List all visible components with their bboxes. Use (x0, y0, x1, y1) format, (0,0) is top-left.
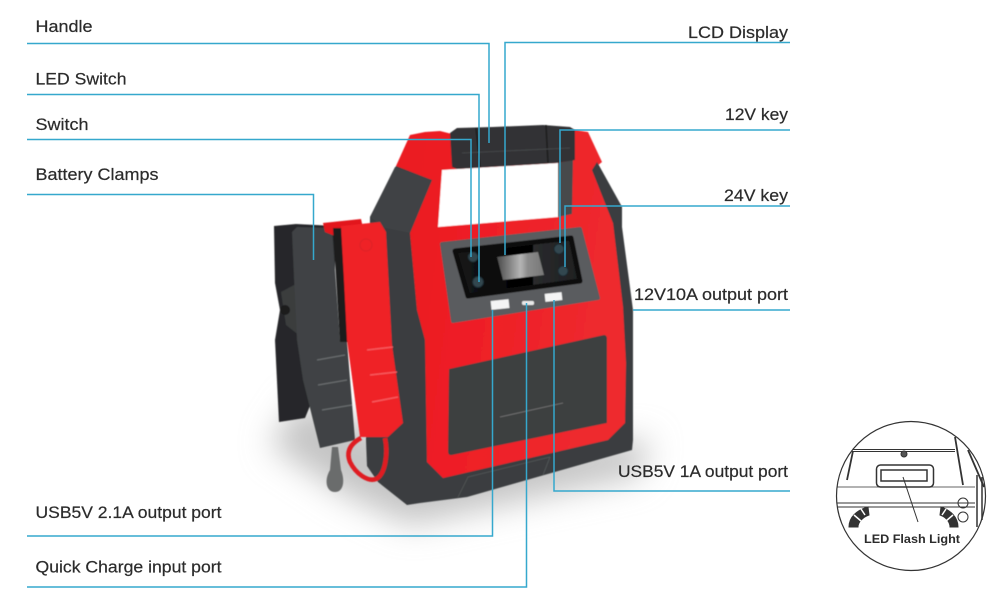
red frame of handle and front (396, 130, 626, 478)
label: Battery Clamps: Battery Clamps (36, 166, 158, 184)
USB and input ports (491, 292, 562, 310)
inset: LED flash light (836, 422, 986, 570)
label: USB5V 1A output port: USB5V 1A output port (618, 463, 788, 481)
label: 24V key: 24V key (724, 187, 789, 205)
label: Switch: Switch (36, 116, 88, 134)
label: LCD Display: LCD Display (688, 24, 789, 42)
red clamp cable loop (348, 438, 386, 480)
right grey side guard (592, 162, 622, 227)
callout leader lines (27, 42, 790, 587)
label: USB5V 2.1A output port: USB5V 2.1A output port (36, 504, 222, 522)
rear dark body (366, 150, 633, 505)
label: LED Switch: LED Switch (36, 70, 126, 88)
inset caption: LED Flash Light (864, 532, 960, 546)
label: 12V10A output port: 12V10A output port (634, 286, 788, 304)
handle window (438, 163, 558, 227)
dark inner strip of the right upright (558, 160, 573, 217)
ground shadow (270, 400, 650, 525)
handle grip (450, 125, 575, 169)
clamp grey pull tab (327, 447, 343, 492)
inset line drawing (837, 437, 984, 527)
product: jump starter (274, 125, 633, 505)
speaker grille (448, 335, 607, 455)
label: Quick Charge input port: Quick Charge input port (36, 558, 222, 576)
skirt detail (458, 457, 550, 497)
panel buttons (468, 244, 568, 288)
left grey shoulder guard (370, 167, 432, 233)
control panel grey bezel (442, 229, 598, 321)
LCD display (497, 252, 544, 280)
label: 12V key: 12V key (725, 106, 789, 124)
black key panel (455, 238, 580, 296)
grille slot (500, 403, 563, 417)
label: Handle: Handle (36, 18, 92, 36)
red clamp (323, 219, 403, 480)
black clamp (274, 224, 355, 492)
